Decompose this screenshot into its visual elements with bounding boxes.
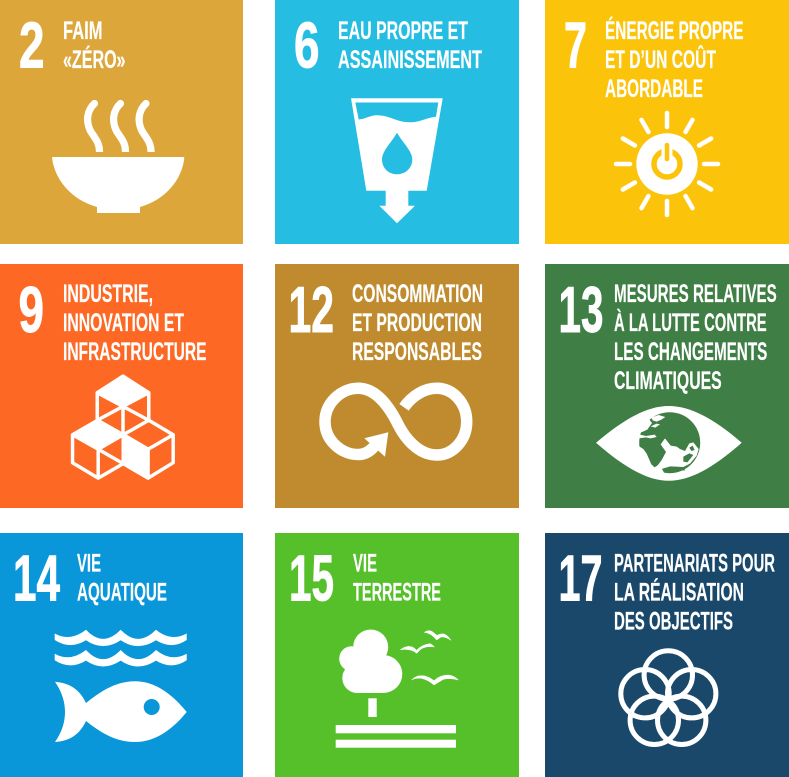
panel: goal 6 (275, 0, 519, 244)
heading: vie aquatique (77, 549, 167, 606)
icon: sun with power symbol (616, 113, 718, 215)
heading: énergie propre (605, 16, 744, 103)
icon: eye with globe (596, 406, 742, 481)
heading: partenariats pour (614, 549, 775, 635)
number 2: 2 (19, 8, 44, 82)
heading: consommation et production responsables: RESPONSABLES (352, 338, 482, 366)
number 6: 6 (294, 8, 320, 82)
heading: industrie, innovation et infrastructure: INDUSTRIE, (63, 280, 153, 308)
heading: mesures relatives: CLIMATIQUES (614, 367, 722, 395)
heading: énergie propre: ET D’UN COÛT (605, 44, 716, 74)
icon: ground lines (336, 725, 456, 748)
heading: vie terrestre: TERRESTRE (353, 578, 441, 606)
icon: interlocking rings (621, 651, 716, 744)
heading: vie aquatique: VIE (77, 549, 101, 577)
number 15: 15 (289, 541, 334, 614)
icon: tree (339, 630, 402, 717)
number 17: 17 (558, 541, 602, 614)
icon: fish (55, 681, 187, 742)
panel: goal 14 (0, 533, 243, 777)
panel: goal 15 (275, 533, 519, 777)
number 14: 14 (13, 541, 60, 614)
heading: faim zéro: «ZÉRO» (63, 45, 126, 74)
icon: waves (55, 630, 187, 666)
number 13: 13 (558, 273, 604, 346)
heading: eau propre et assainissement: EAU PROPRE ET (338, 17, 468, 45)
heading: vie terrestre (353, 549, 441, 606)
icon: birds (400, 631, 458, 685)
heading: faim zéro (63, 17, 126, 74)
heading: vie aquatique: AQUATIQUE (77, 578, 167, 606)
panel: goal 2 (0, 0, 243, 244)
number 9: 9 (18, 273, 44, 346)
heading: eau propre et assainissement (338, 17, 482, 74)
heading: consommation et production responsables: CONSOMMATION (352, 280, 483, 308)
heading: industrie, innovation et infrastructure: INFRASTRUCTURE (63, 338, 206, 366)
number 12: 12 (288, 273, 334, 346)
panel: goal 17 (545, 533, 789, 777)
heading: faim zéro: FAIM (63, 17, 102, 45)
heading: consommation et production responsables (352, 280, 483, 366)
icon: infinity loop arrow (325, 388, 467, 457)
heading: énergie propre: ABORDABLE (605, 75, 703, 103)
panel: goal 9 (0, 264, 243, 508)
icon: water glass with arrow (351, 98, 443, 223)
heading: eau propre et assainissement: ASSAINISSEMENT (338, 46, 482, 74)
number 7: 7 (564, 8, 587, 82)
heading: industrie, innovation et infrastructure (63, 280, 206, 366)
icon: steaming bowl (52, 104, 184, 213)
heading: vie terrestre: VIE (353, 549, 377, 577)
heading: consommation et production responsables: ET PRODUCTION (352, 309, 482, 337)
heading: industrie, innovation et infrastructure: INNOVATION ET (63, 309, 184, 337)
panel: goal 13 (545, 264, 789, 508)
heading: mesures relatives (614, 280, 777, 395)
panel: goal 7 (545, 0, 789, 244)
icon: stacked cubes (73, 376, 173, 478)
panel: goal 12 (275, 264, 519, 508)
